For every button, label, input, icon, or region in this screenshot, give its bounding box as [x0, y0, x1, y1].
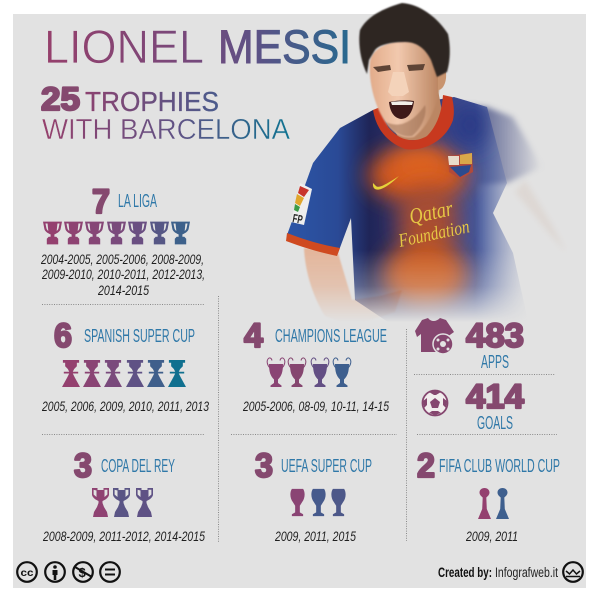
- trophies: [267, 358, 351, 387]
- sponsor: Foundation: [396, 216, 471, 252]
- panel: Spanish Super Cup: [41, 317, 209, 414]
- panel: La Liga: [40, 183, 205, 298]
- years: 2004-2005, 2005-2006, 2008-2009,: [40, 252, 204, 267]
- trophies: [478, 488, 509, 519]
- icon: cc: cc: [20, 567, 34, 579]
- created by: Created by:: [438, 565, 492, 580]
- sponsor: Qatar: [407, 195, 455, 229]
- stubble: [386, 105, 426, 136]
- label: LA LIGA: [118, 191, 157, 211]
- licence icons: [17, 562, 120, 582]
- value: 414: [466, 378, 524, 416]
- panel: appearances: [415, 317, 524, 372]
- subheading: [41, 81, 291, 146]
- hair: [359, 3, 450, 77]
- panel: UEFA Super Cup: [255, 447, 372, 544]
- panel: FIFA Club World Cup: [417, 447, 560, 544]
- years: 2014-2015: [97, 283, 149, 298]
- icon: non-commercial: $: [78, 565, 86, 580]
- icon: football: [422, 390, 448, 416]
- trophies word: TROPHIES: [85, 86, 219, 117]
- shirt: torso: [288, 97, 522, 320]
- shirt: La Liga patch: FP: [291, 211, 304, 227]
- player photo: [286, 2, 556, 320]
- years: 2005, 2006, 2009, 2010, 2011, 2013: [41, 399, 209, 414]
- years: 2009, 2011: [465, 529, 518, 544]
- years: 2008-2009, 2011-2012, 2014-2015: [42, 529, 205, 544]
- trophies: [92, 488, 153, 517]
- years: 2009, 2011, 2015: [274, 529, 356, 544]
- mouth: [389, 100, 414, 119]
- label: UEFA SUPER CUP: [281, 456, 372, 476]
- title: [44, 20, 351, 73]
- trophies: [290, 489, 346, 516]
- years: [40, 252, 205, 298]
- count: 2: [417, 447, 435, 485]
- value: 483: [466, 317, 524, 355]
- trophies: [43, 222, 190, 244]
- arm: left: [303, 248, 402, 316]
- title: surname: MESSI: [218, 20, 351, 73]
- shirt: sleeve cuff: [286, 233, 340, 256]
- face: [370, 40, 440, 137]
- total number: 25: [41, 81, 80, 117]
- count: 4: [244, 317, 263, 355]
- site name: Infografweb.it: [495, 565, 558, 580]
- panel: Champions League: [242, 317, 389, 414]
- arm: right, faded: [515, 180, 566, 252]
- label: CHAMPIONS LEAGUE: [275, 326, 387, 346]
- dividers: [42, 296, 557, 542]
- years: 2009-2010, 2010-2011, 2012-2013,: [41, 267, 205, 282]
- label: SPANISH SUPER CUP: [84, 326, 195, 346]
- label: GOALS: [477, 413, 513, 433]
- shirt: La Liga patch: [291, 183, 312, 227]
- label: COPA DEL REY: [101, 456, 175, 476]
- nose: [388, 72, 409, 96]
- trophies: [62, 360, 186, 387]
- count: 3: [255, 447, 273, 485]
- swoosh: [373, 176, 399, 190]
- icon: shirt with ball: [415, 318, 454, 354]
- with barcelona: WITH BARCELONA: [42, 114, 291, 146]
- teeth: [391, 101, 413, 105]
- label: APPS: [481, 352, 509, 372]
- title: first name: LIONEL: [44, 20, 204, 73]
- crest: [448, 153, 473, 179]
- count: 6: [54, 317, 72, 355]
- count: 7: [92, 183, 110, 221]
- shirt: right sleeve, faded: [468, 100, 538, 186]
- ear: [438, 72, 446, 90]
- sponsor: [396, 195, 471, 252]
- eyes: [373, 64, 425, 72]
- neck: [382, 90, 444, 140]
- years: 2005-2006, 08-09, 10-11, 14-15: [242, 399, 389, 414]
- panel: goals: [422, 378, 524, 433]
- icon: attribution: [45, 562, 65, 582]
- credit: [438, 562, 583, 582]
- panel: Copa del Rey: [42, 447, 205, 544]
- shirt: collar: [373, 95, 454, 149]
- count: 3: [74, 447, 92, 485]
- icon: logo: [563, 562, 583, 582]
- icon: no derivatives: [100, 562, 120, 582]
